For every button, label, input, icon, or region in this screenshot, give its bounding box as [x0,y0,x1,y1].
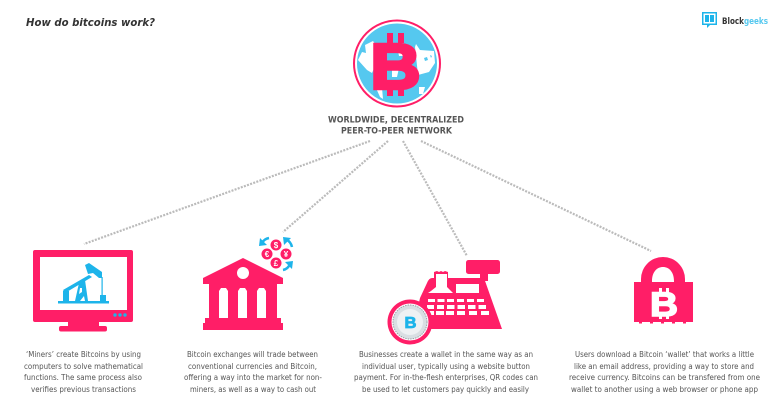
text block: businesses [354,349,538,394]
text block: businesses: payment. For in-the-flesh enterprises, QR codes can [354,372,538,382]
icon: bitcoin globe: B [370,30,420,102]
icon: currency coins and arrows [259,237,293,270]
heading: network [328,116,464,136]
text block: users [569,349,760,394]
text block: exchanges: Bitcoin exchanges will trade between [187,349,318,359]
icon: currency coins and arrows: ¥ [284,250,289,259]
text block: users: like an email address, providing a way to store and [574,361,754,371]
text block: exchanges: miners, as well as a way to cash out [190,384,317,394]
icon: currency coins and arrows: € [265,250,270,259]
icon: bitcoin globe [354,20,440,106]
heading: network: PEER-TO-PEER NETWORK [341,126,452,136]
icon: monitor with pumpjack [33,250,133,332]
icon: cash register with bitcoin coin: B [404,315,416,332]
icon: currency coins and arrows: £ [274,259,279,268]
text block: exchanges: offering a way into the market for non- [184,372,322,382]
icon: bank [203,258,283,330]
dotted connector lines [84,141,651,256]
logo: Blockgeeks [702,12,768,28]
text block: miners [24,349,143,394]
heading: network: WORLDWIDE, DECENTRALIZED [328,116,464,126]
text block: businesses: Businesses create a wallet in the same way as an [359,349,533,359]
icon: bitcoin padlock: B [650,286,678,324]
text block: exchanges: conventional currencies and Bitcoin, [188,361,317,371]
icon: bitcoin padlock [634,257,693,324]
text block: miners: verifies previous transactions [31,384,136,394]
text block: miners: computers to solve mathematical [24,361,143,371]
text block: miners: functions. The same process also [24,372,142,382]
text block: businesses: be used to let customers pay quickly and easily [362,384,529,394]
text block: exchanges [184,349,322,394]
text block: businesses: individual user, typically using a website button [362,361,530,371]
icon: cash register with bitcoin coin [388,260,502,344]
logo: Blockgeeks: Blockgeeks [722,17,768,27]
icon: currency coins and arrows: $ [274,241,279,250]
title: How do bitcoins work? [26,16,156,29]
text block: miners: ‘Miners’ create Bitcoins by using [26,349,141,359]
